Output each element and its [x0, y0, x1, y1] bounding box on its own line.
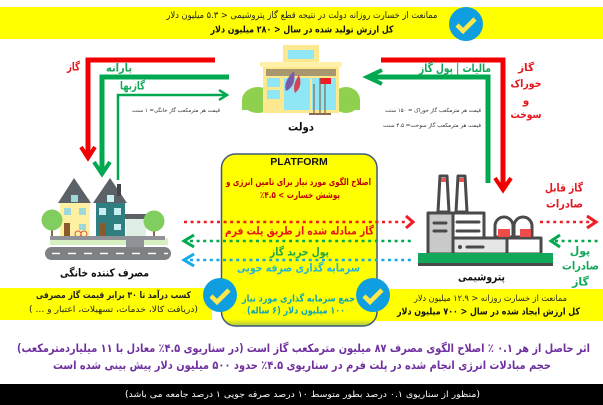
label: exportable gas: گاز قابل: [545, 182, 583, 194]
icon: petrochemical plant: [418, 176, 553, 266]
panel: household yellow note: (دریافت کالا، خدمات، تسهیلات، اعتبار و ... ): [29, 305, 198, 315]
icon: household houses: [42, 178, 171, 260]
label: exportable gas: صادرات: [546, 198, 583, 210]
panel: top yellow banner: کل ارزش تولید شده در سال < ۲۸۰ میلیون دلار: [210, 24, 394, 36]
note: household gas price: قیمت هر مترمکعب گاز خانگی= ۱ سنت: [132, 107, 220, 114]
label: government: دولت: [288, 120, 314, 134]
arrow: dotted blue saving investment: [184, 254, 412, 266]
platform exchanged gas label: گاز مبادله شده از طریق پلت فرم: [225, 224, 374, 238]
label: feed and fuel gas: [510, 61, 542, 121]
arrow: dotted red exchanged gas: [184, 216, 413, 228]
panel: top yellow banner: ممانعت از خسارت روزانه دولت در نتیجه قطع گاز پتروشیمی < ۵.۳ میلیون دلار: [166, 9, 438, 21]
arrow: dotted green gas payment: [184, 235, 412, 247]
platform saving investment label: سرمایه گذاری صرفه جویی: [237, 262, 360, 274]
platform gas payment label: پول خرید گاز: [269, 246, 329, 258]
arrow: red gas line to petrochemical: [381, 60, 511, 190]
text block: purple summary: حجم مبادلات انرژی انجام شده در پلت فرم در سناریوی ۴.۵٪ حدود ۵۰۰ میلیون دلار پیش بینی شده است: [53, 358, 551, 373]
icon: left check badge: [203, 278, 237, 312]
label: export gas money: صادرات: [562, 260, 599, 272]
label: subsidy: یارانه: [106, 62, 132, 74]
label: gas: گاز: [66, 60, 80, 74]
label: exportable gas: [545, 182, 583, 210]
platform reform text: پوشش خسارت > ۴.۵٪: [260, 191, 340, 201]
note: fuel gas price: قیمت هر مترمکعب گاز سوخت= ۴.۵ سنت: [383, 122, 481, 129]
arrow: thin green gas bills line to government: [118, 90, 227, 180]
platform reform text: اصلاح الگوی مورد نیاز برای تامین انرژی و: [225, 176, 371, 188]
panel: platform: [222, 154, 377, 326]
label: export gas money: پول: [570, 244, 590, 258]
label: feed and fuel gas: گاز: [517, 61, 535, 74]
label: gas bills: گازبها: [120, 80, 145, 92]
platform reform text: [225, 176, 371, 201]
panel: household yellow note: کسب درآمد تا ۳۰ برابر قیمت گاز مصرفی: [36, 289, 192, 301]
label: feed and fuel gas: خوراک: [510, 78, 542, 90]
label: petrochemical: پتروشیمی: [458, 270, 505, 284]
panel: black footnote: (منظور از سناریوی ۰.۱ درصد بطور متوسط ۱۰ درصد صرفه جویی ۱ درصد جامعه می باشد): [125, 390, 480, 400]
icon: government building: [242, 45, 360, 115]
arrow: green subsidy line to households: [94, 77, 229, 174]
panel: top yellow banner: [0, 7, 603, 41]
icon: right check badge: [356, 278, 390, 312]
arrow: red gas line to households: [81, 60, 215, 158]
panel: household yellow note: [0, 288, 212, 320]
label: household consumer: مصرف کننده خانگی: [60, 266, 149, 280]
arrow: dotted green export money: [551, 235, 598, 247]
panel: petrochemical yellow note: ممانعت از خسارت روزانه < ۱۲.۹ میلیون دلار: [413, 294, 567, 304]
platform total investment: [241, 292, 355, 316]
arrow: green tax line to government: [367, 70, 488, 183]
label: feed and fuel gas: سوخت: [510, 109, 542, 121]
panel: petrochemical yellow note: کل ارزش ایجاد شده در سال < ۷۰۰ میلیون دلار: [396, 306, 580, 318]
panel: black footnote: [0, 384, 603, 405]
text block: purple summary: اثر حاصل از هر ۰.۱ ٪ اصلاح الگوی مصرف ۸۷ میلیون مترمکعب گاز است (در سناریوی ۴.۵٪ معادل با ۱۱ میلیاردمترمکعب): [17, 341, 590, 356]
platform total investment: جمع سرمایه گذاری مورد نیاز: [241, 292, 355, 304]
label: feed and fuel gas: و: [522, 95, 529, 107]
arrow: dotted red export gas: [540, 216, 596, 228]
label: tax and gas money: مالیات | پول گاز: [418, 61, 491, 76]
note: feed gas price: قیمت هر مترمکعب گاز خوراک = ۱۵۰ سنت: [385, 107, 481, 114]
panel: petrochemical yellow note: [376, 289, 603, 321]
text block: purple summary: [17, 341, 590, 373]
platform title: PLATFORM: [270, 156, 328, 168]
platform total investment: ۱۰۰ میلیون دلار (۶ ساله): [247, 306, 345, 316]
label: export gas money: [562, 244, 599, 288]
label: export gas money: گاز: [571, 276, 590, 288]
